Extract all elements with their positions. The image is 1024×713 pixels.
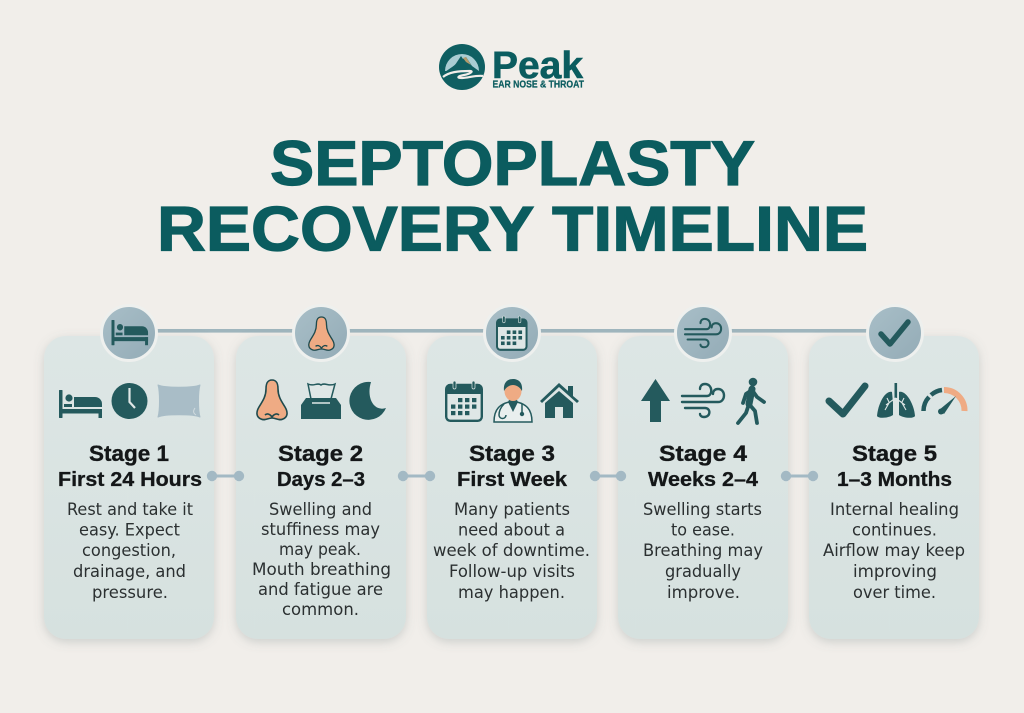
stage 4 text (643, 500, 763, 603)
stage 4 heading: Stage 4 (659, 441, 748, 466)
title (157, 129, 868, 264)
stage 1 text: congestion, (82, 541, 176, 561)
icon: calendar (446, 381, 482, 421)
stage 2 heading (277, 441, 365, 491)
stage 4 heading (648, 441, 759, 491)
stage 5 heading: 1–3 Months (837, 469, 952, 491)
stage 5 text: continues. (852, 520, 937, 540)
icon: mountain logo mark (439, 44, 485, 90)
stage 3 text: Follow-up visits (449, 562, 575, 582)
stage 4 text: Breathing may (643, 541, 763, 561)
timeline marker: bed (102, 306, 156, 360)
icon: house (540, 383, 579, 418)
stage 3 text: need about a (458, 520, 565, 540)
panel: stage 4 (618, 306, 788, 639)
connector: stage 2 to 3 (398, 471, 435, 481)
icon: clock (112, 383, 148, 419)
stage 2 text: and fatigue are (258, 580, 383, 600)
icon: moon (349, 382, 386, 420)
stage 1 text: pressure. (92, 583, 168, 603)
timeline marker: nose (294, 306, 348, 360)
stage 2 text: Swelling and (269, 500, 372, 520)
icon: check mark (829, 386, 865, 414)
connector: stage 4 to 5 (781, 471, 818, 481)
stage 5 text: Internal healing (830, 500, 959, 520)
stage 3 text: Many patients (454, 500, 570, 520)
stage 3 text (433, 500, 590, 603)
icon: lungs (877, 383, 915, 418)
stage 5 text (823, 500, 965, 603)
panel: stage 5 (809, 306, 979, 639)
icon: pillow (158, 385, 200, 417)
icon: gauge (924, 390, 965, 414)
panel: stage 1 (44, 306, 214, 639)
stage 1 text (67, 500, 193, 603)
stage 1 heading (58, 441, 202, 491)
stage 5 text: improving (853, 562, 937, 582)
icon: bed (59, 390, 102, 418)
stage 4 text: improve. (667, 583, 740, 603)
stage 1 text: Rest and take it (67, 500, 193, 520)
icon: nose (257, 380, 287, 420)
connector: stage 3 to 4 (590, 471, 626, 481)
icon: tissue box (301, 384, 341, 419)
stage 5 heading: Stage 5 (852, 441, 937, 466)
stage 3 heading (457, 441, 568, 491)
stage 3 heading: Stage 3 (469, 441, 555, 466)
stage 5 heading (837, 441, 952, 491)
logo wordmark: Peak (492, 45, 584, 87)
title: RECOVERY TIMELINE (157, 194, 868, 264)
stage 2 heading: Stage 2 (278, 441, 363, 466)
icon: walking person (738, 378, 764, 423)
timeline line (129, 329, 895, 333)
stage 4 text: gradually (665, 562, 741, 582)
stage 1 heading: Stage 1 (89, 441, 169, 466)
icon: up arrow (641, 379, 670, 422)
connector: stage 1 to 2 (207, 471, 244, 481)
stage 4 text: Swelling starts (643, 500, 762, 520)
stage 4 heading: Weeks 2–4 (648, 469, 759, 491)
stage 4 text: to ease. (671, 520, 735, 540)
timeline marker: wind (676, 306, 730, 360)
stage 1 text: drainage, and (73, 562, 186, 582)
title: SEPTOPLASTY (270, 129, 755, 199)
stage 1 heading: First 24 Hours (58, 469, 202, 491)
stage 2 text: may peak. (279, 540, 361, 560)
stage 5 text: over time. (853, 583, 936, 603)
stage 2 text: stuffiness may (261, 520, 380, 540)
logo tagline: EAR NOSE & THROAT (492, 78, 584, 90)
stage 5 text: Airflow may keep (823, 541, 965, 561)
icon: wind (682, 384, 724, 417)
stage 3 text: week of downtime. (433, 541, 590, 561)
stage 3 heading: First Week (457, 469, 568, 491)
stage 2 heading: Days 2–3 (277, 469, 365, 491)
stage 2 text: common. (282, 600, 359, 620)
panel: stage 3 (427, 306, 597, 639)
stage 2 text (252, 500, 391, 620)
logo: Peak Ear Nose & Throat (439, 44, 584, 90)
stage 1 text: easy. Expect (79, 520, 180, 540)
stage 2 text: Mouth breathing (252, 560, 391, 580)
timeline marker: check (868, 306, 922, 360)
icon: doctor (494, 379, 532, 422)
timeline marker: calendar (484, 306, 540, 360)
stage 3 text: may happen. (458, 583, 565, 603)
panel: stage 2 (236, 306, 406, 639)
